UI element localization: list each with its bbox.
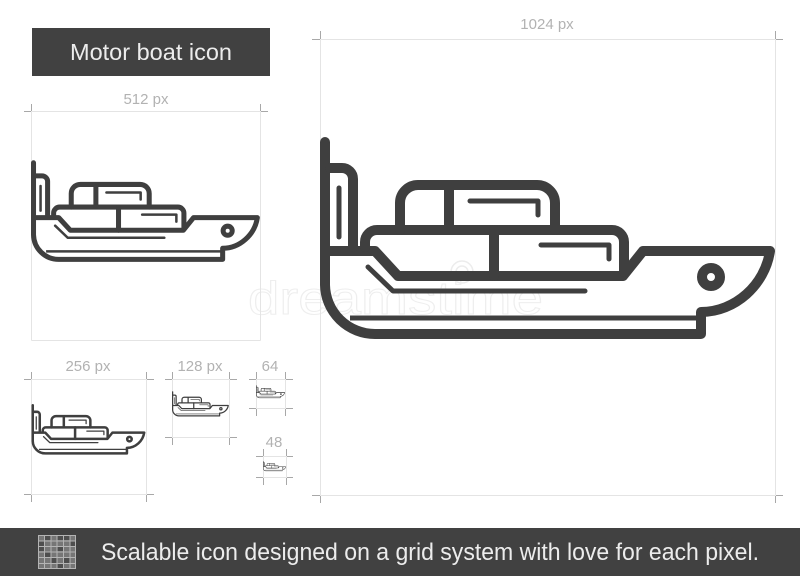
- size label: 128 px: 128 px: [177, 358, 223, 375]
- watermark: dreamstime: [248, 272, 543, 324]
- size label: 64: 64: [262, 358, 278, 375]
- boat icon: 128 px: [173, 392, 228, 416]
- size label: 1024 px: 1024 px: [520, 16, 574, 33]
- panel: 128 px icon: [165, 358, 237, 445]
- panel: 256 px icon: [24, 358, 154, 502]
- size label: 256 px: 256 px: [65, 358, 111, 375]
- grid frame: 256 px: [24, 372, 154, 502]
- footer bar: [0, 528, 800, 576]
- icon: pixel grid: [38, 535, 76, 569]
- grid frame: 64 px: [249, 372, 293, 416]
- grid frame: 48 px: [256, 449, 293, 485]
- panel: 1024 px icon: [312, 16, 783, 503]
- watermark: [248, 261, 543, 324]
- grid frame: 1024 px: [312, 31, 783, 503]
- boat icon: 48 px: [263, 461, 286, 471]
- size label: 512 px: 512 px: [123, 91, 169, 108]
- title banner: [32, 28, 270, 76]
- footer tagline: Scalable icon designed on a grid system with love for each pixel.: [101, 539, 759, 566]
- grid frame: 128 px: [165, 372, 237, 445]
- boat icon: 256 px: [33, 405, 144, 453]
- boat icon: 512 px: [34, 163, 257, 259]
- boat icon: 1024 px: [325, 142, 770, 334]
- panel: 64 px icon: [249, 358, 293, 416]
- size label: 48: 48: [266, 434, 282, 451]
- boat icon: 64 px: [256, 386, 285, 398]
- grid frame: 512 px: [24, 104, 268, 340]
- panel: 512 px icon: [24, 91, 268, 340]
- panel: 48 px icon: [256, 434, 293, 485]
- title banner: Motor boat icon: [70, 39, 232, 65]
